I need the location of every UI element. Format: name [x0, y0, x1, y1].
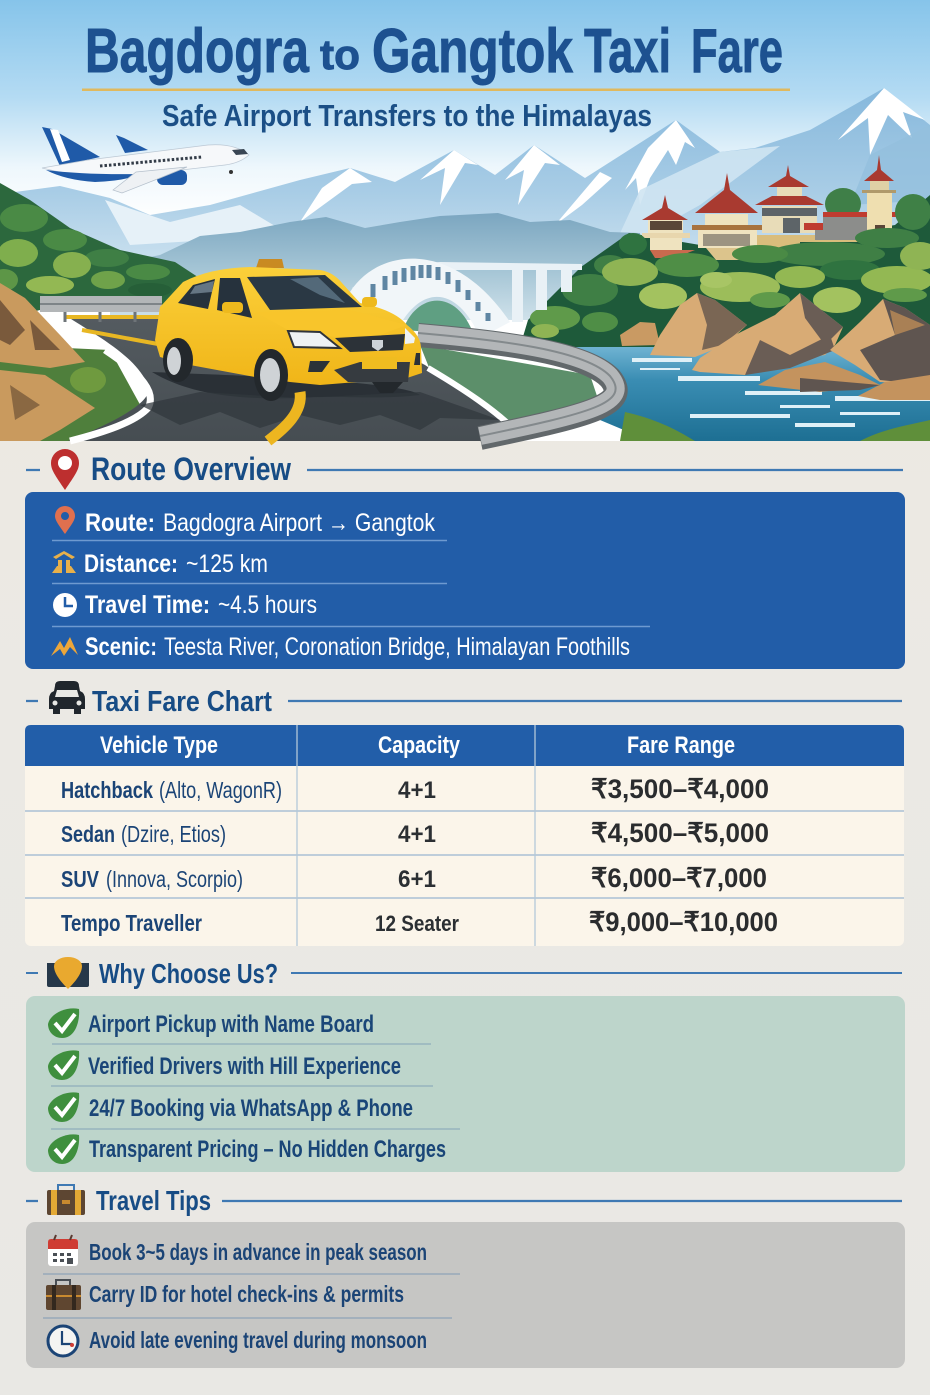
row: sedan [61, 818, 769, 848]
scenic row: Teesta River, Coronation Bridge, Himalayan Foothills [164, 633, 630, 661]
why item 3: 24/7 Booking via WhatsApp & Phone [89, 1095, 413, 1122]
panel: why choose us list [26, 996, 905, 1172]
snow mountains [0, 88, 930, 320]
himalayan monastery buildings [642, 155, 902, 260]
route row: Bagdogra Airport → Gangtok [163, 509, 435, 537]
panel: route details [25, 492, 905, 669]
row: hatchback [61, 774, 769, 804]
why item 2: Verified Drivers with Hill Experience [88, 1053, 401, 1080]
title: Gangtok [372, 17, 573, 86]
travel time row: Travel Time: [85, 591, 210, 619]
heading: why choose us [26, 957, 902, 989]
row: suv: (Innova, Scorpio) [106, 866, 243, 892]
title: to [320, 31, 360, 78]
heading: travel tips [26, 1185, 902, 1216]
row: sedan: ₹4,500–₹5,000 [591, 818, 769, 848]
yellow taxi [155, 259, 422, 401]
why item 4: Transparent Pricing – No Hidden Charges [89, 1136, 446, 1163]
section: taxi fare chart [25, 681, 904, 946]
distance row [84, 550, 268, 578]
travel time row [85, 591, 317, 619]
icon: clock [53, 593, 77, 617]
check icon 3 [48, 1092, 79, 1122]
guardrails [40, 304, 616, 438]
travel time row: ~4.5 hours [218, 591, 317, 619]
icon: calendar [48, 1235, 78, 1266]
table header: Vehicle Type [100, 732, 218, 759]
route row [85, 509, 435, 537]
subtitle: Safe Airport Transfers to the Himalayas [162, 98, 652, 133]
river rocks [620, 293, 930, 400]
row: tempo traveller: Tempo Traveller [61, 910, 202, 936]
why item 1: Airport Pickup with Name Board [88, 1011, 374, 1038]
row: suv: 6+1 [398, 866, 436, 893]
title underline [82, 88, 790, 91]
icon: route pin [55, 506, 75, 534]
heading: taxi fare chart [26, 681, 902, 718]
title: Bagdogra [85, 17, 309, 86]
route row: Route: [85, 509, 155, 537]
row: tempo traveller [61, 907, 778, 937]
row: tempo traveller: ₹9,000–₹10,000 [589, 907, 778, 937]
right forest [522, 195, 930, 370]
hero illustration [0, 0, 930, 441]
heading: travel tips: Travel Tips [96, 1185, 211, 1216]
mountain road [65, 300, 520, 441]
table header: Fare Range [627, 732, 735, 759]
section: travel tips [26, 1185, 905, 1368]
row: sedan: Sedan [61, 821, 115, 847]
heading: why choose us: Why Choose Us? [99, 958, 278, 989]
forest foliage [530, 194, 930, 338]
heading: route overview [26, 449, 903, 490]
scenic row: Scenic: [85, 633, 157, 661]
coronation bridge [350, 259, 582, 338]
row: sedan: (Dzire, Etios) [121, 821, 226, 847]
heading: taxi fare chart: Taxi Fare Chart [92, 686, 272, 718]
airplane [42, 127, 249, 193]
left rocks [0, 283, 106, 441]
distance row: ~125 km [186, 550, 268, 578]
distance row: Distance: [84, 550, 178, 578]
ground behind road [0, 345, 160, 441]
row: hatchback: 4+1 [398, 777, 436, 804]
icon: briefcase [46, 1280, 81, 1310]
table header: Capacity [378, 732, 461, 759]
title: Taxi [584, 17, 671, 86]
check icon 2 [48, 1050, 79, 1080]
icon: distance [52, 551, 76, 573]
check icon 1 [48, 1008, 79, 1038]
section: why choose us [26, 957, 905, 1172]
table header [100, 732, 735, 759]
tip 3: Avoid late evening travel during monsoon [89, 1327, 427, 1353]
panel: travel tips list [26, 1222, 905, 1368]
heading: route overview: Route Overview [91, 451, 291, 487]
row: suv: ₹6,000–₹7,000 [591, 863, 767, 893]
row: hatchback: ₹3,500–₹4,000 [591, 774, 769, 804]
title: Fare [691, 17, 783, 86]
row: hatchback: Hatchback [61, 777, 153, 803]
sky [0, 0, 930, 441]
row: sedan: 4+1 [398, 821, 436, 848]
tip 2: Carry ID for hotel check-ins & permits [89, 1281, 404, 1307]
title [85, 17, 783, 86]
left forested hillside [0, 183, 210, 320]
row: hatchback: (Alto, WagonR) [159, 777, 282, 803]
row: suv: SUV [61, 866, 100, 892]
check icon 4 [48, 1134, 79, 1164]
inner road verge [420, 345, 600, 432]
tip 1: Book 3~5 days in advance in peak season [89, 1239, 427, 1265]
row: suv [61, 863, 767, 893]
row: tempo traveller: 12 Seater [375, 911, 459, 936]
fare table [25, 725, 904, 946]
teesta river [570, 347, 930, 441]
icon: mountain [51, 637, 78, 656]
icon: clock [48, 1326, 78, 1356]
section: route overview [25, 449, 905, 669]
